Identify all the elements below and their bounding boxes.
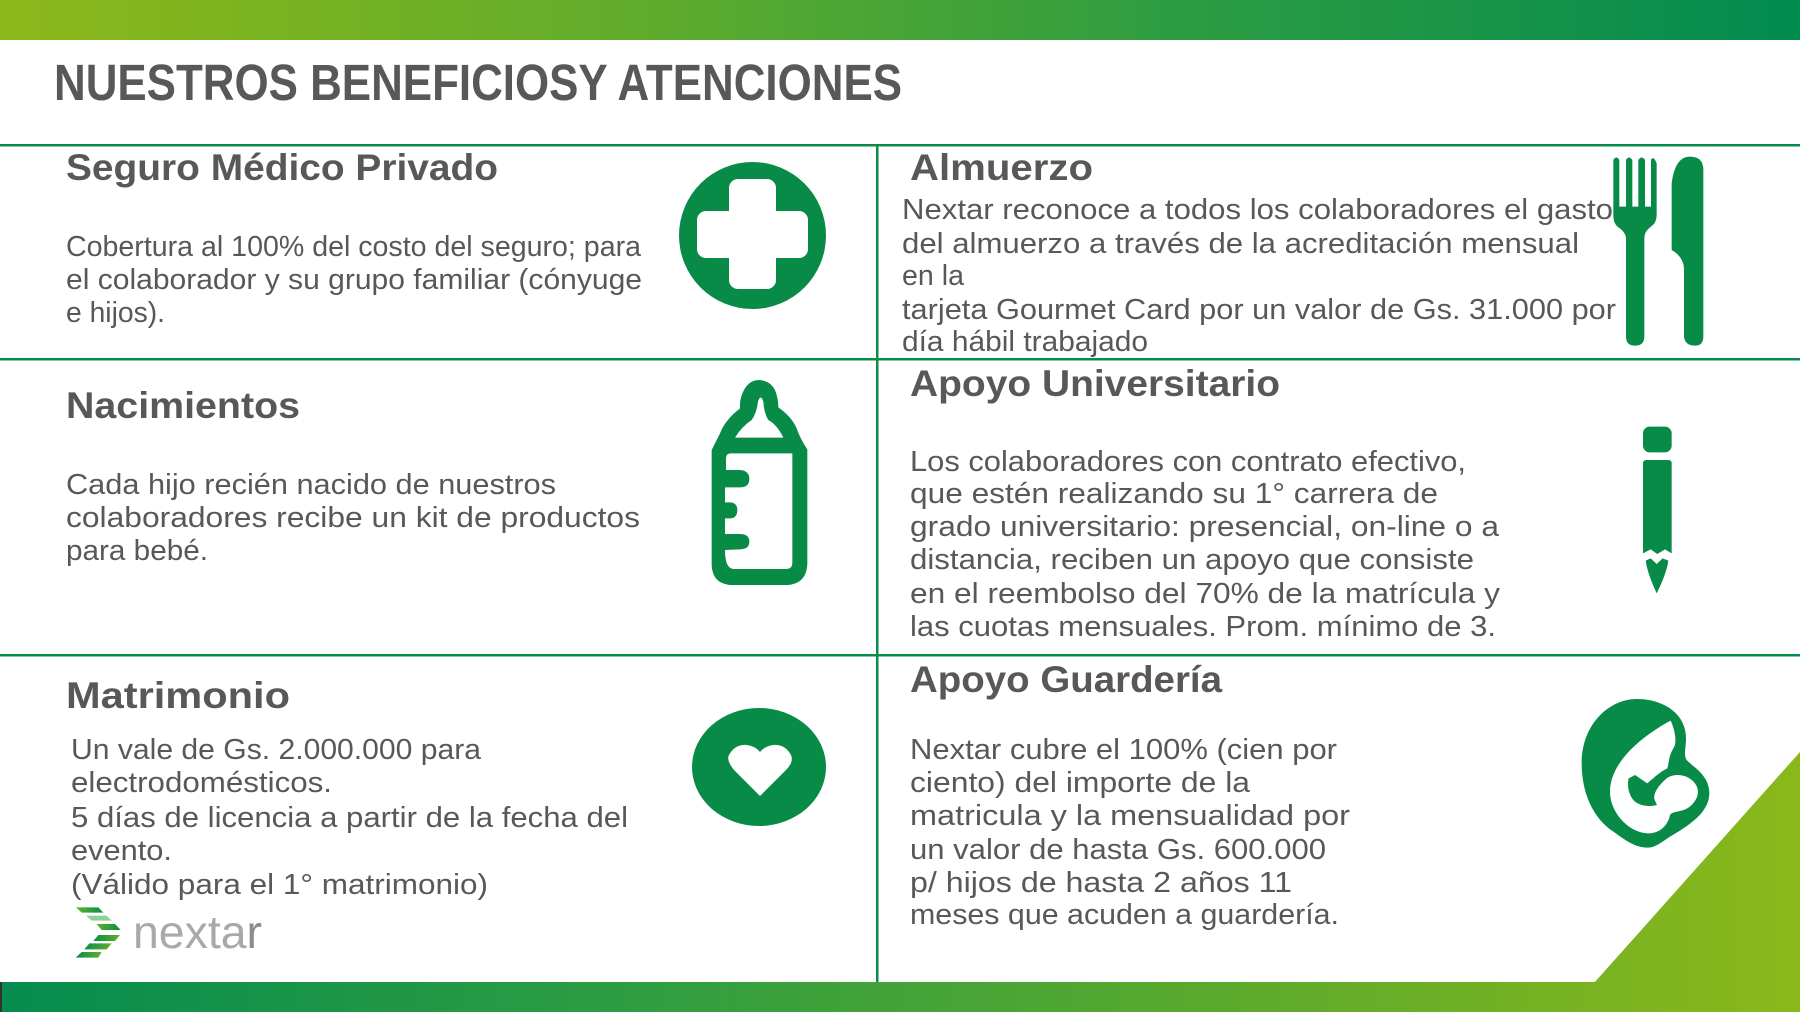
body text: meses que acuden a guardería. (910, 899, 1339, 931)
icon: pencil (1643, 427, 1672, 593)
body text (910, 446, 1501, 643)
body text: grado universitario: presencial, on-line o a (910, 511, 1500, 543)
logo mark (76, 907, 121, 958)
body text: ciento) del importe de la (910, 767, 1251, 799)
heading: Apoyo Guardería (910, 659, 1222, 700)
body text: evento. (71, 835, 172, 867)
icon: fork and knife (1613, 157, 1703, 346)
panel: Seguro Médico Privado (66, 147, 826, 329)
body text (71, 734, 628, 901)
heading: Apoyo Universitario (910, 363, 1280, 404)
body text (902, 194, 1616, 358)
body text: Nextar cubre el 100% (cien por (910, 734, 1337, 766)
body text: matricula y la mensualidad por (910, 800, 1350, 832)
body text: colaboradores recibe un kit de productos (66, 502, 640, 534)
icon: medical cross (679, 162, 826, 309)
body text: que estén realizando su 1° carrera de (910, 478, 1438, 510)
body text: tarjeta Gourmet Card por un valor de Gs. 31.000 por (902, 294, 1616, 326)
body text (910, 734, 1350, 931)
heading: Almuerzo (910, 147, 1093, 188)
logo wordmark: nextar (133, 906, 262, 958)
body text: el colaborador y su grupo familiar (cónyuge (66, 264, 642, 296)
heading: Seguro Médico Privado (66, 147, 498, 188)
bottom gradient bar (0, 982, 1800, 1012)
heading: Matrimonio (66, 675, 290, 716)
corner green triangle (1594, 752, 1800, 983)
panel: Apoyo Universitario (910, 363, 1672, 643)
panel: Almuerzo (902, 147, 1703, 358)
body text (66, 231, 642, 329)
body text (66, 469, 640, 567)
body text: en la (902, 260, 965, 292)
icon: heart (692, 708, 826, 826)
body text: (Válido para el 1° matrimonio) (71, 869, 488, 901)
icon: baby bottle (712, 380, 807, 585)
top gradient bar (0, 0, 1800, 40)
body text: las cuotas mensuales. Prom. mínimo de 3. (910, 611, 1496, 643)
body text: e hijos). (66, 297, 165, 329)
body text: Un vale de Gs. 2.000.000 para (71, 734, 482, 766)
body text: en el reembolso del 70% de la matrícula y (910, 578, 1501, 610)
body text: día hábil trabajado (902, 326, 1148, 358)
panel: Matrimonio (66, 675, 826, 901)
title: NUESTROS BENEFICIOSY ATENCIONES (54, 54, 902, 111)
panel: Nacimientos (66, 380, 807, 585)
logo: nextar (76, 906, 262, 958)
body text: electrodomésticos. (71, 767, 332, 799)
body text: Nextar reconoce a todos los colaboradores el gasto (902, 194, 1613, 226)
body text: Los colaboradores con contrato efectivo, (910, 446, 1466, 478)
body text: un valor de hasta Gs. 600.000 (910, 834, 1326, 866)
body text: Cada hijo recién nacido de nuestros (66, 469, 556, 501)
body text: 5 días de licencia a partir de la fecha del (71, 802, 628, 834)
icon: mother and baby (1582, 699, 1709, 848)
heading: Nacimientos (66, 385, 300, 426)
body text: Cobertura al 100% del costo del seguro; para (66, 231, 642, 263)
panel: Apoyo Guardería (910, 659, 1709, 931)
body text: para bebé. (66, 535, 208, 567)
body text: p/ hijos de hasta 2 años 11 (910, 867, 1292, 899)
body text: del almuerzo a través de la acreditación mensual (902, 228, 1579, 260)
body text: distancia, reciben un apoyo que consiste (910, 544, 1474, 576)
